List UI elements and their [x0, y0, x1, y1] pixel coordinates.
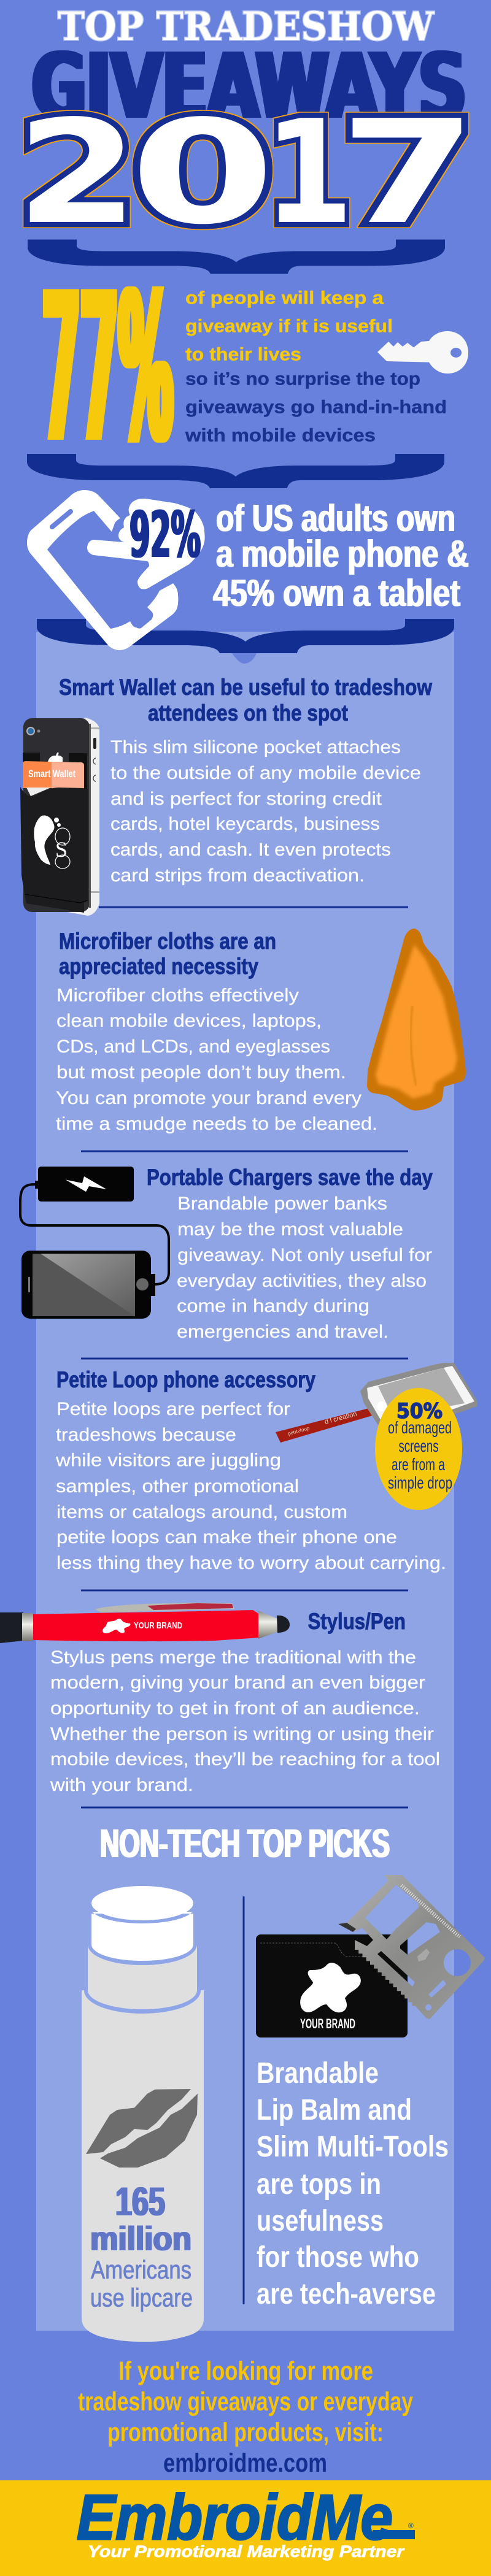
body text: mobile devices, they’ll be reaching for a tool — [50, 1749, 440, 1769]
brace three — [37, 619, 454, 664]
body text: items or catalogs around, custom — [56, 1502, 347, 1522]
body text: Whether the person is writing or using their — [50, 1724, 434, 1744]
image: phone with wallet: Smart Wallet — [28, 768, 75, 780]
body text: CDs, and LCDs, and eyeglasses — [56, 1037, 330, 1057]
icon: wallet logo — [34, 816, 70, 868]
title line: 2017: 7 — [339, 90, 477, 256]
statement: usefulness — [257, 2205, 384, 2237]
body text — [110, 737, 421, 886]
body text: while visitors are juggling — [55, 1451, 281, 1471]
stat: 92 percent: 92% — [130, 497, 201, 572]
footer band — [0, 2480, 491, 2576]
yellow statement: giveaway if it is useful — [185, 316, 393, 337]
image: slim multi-tool — [338, 1875, 485, 2019]
heading: Stylus/Pen — [308, 1609, 406, 1634]
title line: 2017: 2 — [16, 90, 139, 256]
body text: to the outside of any mobile device — [110, 763, 421, 783]
body text — [50, 1647, 440, 1795]
yellow statement: of people will keep a — [185, 288, 384, 309]
title line: top tradeshow: TOP TRADESHOW — [58, 4, 435, 50]
body text: clean mobile devices, laptops, — [56, 1011, 322, 1031]
title line: 2017: 1 — [264, 90, 354, 256]
tagline: Your Promotional Marketing Partner — [88, 2542, 405, 2561]
section: portable chargers — [20, 1165, 433, 1342]
body text — [177, 1194, 432, 1342]
image: phone with loop strap: petiteloop — [287, 1425, 311, 1436]
callout: 50 percent: 50% — [396, 1399, 443, 1424]
title line: 2017: 0 — [130, 90, 275, 256]
body text: opportunity to get in front of an audience. — [50, 1698, 420, 1719]
icon: key — [377, 331, 468, 374]
image: stylus pen: YOUR BRAND — [134, 1620, 182, 1631]
body text: with your brand. — [50, 1775, 193, 1795]
closing call to action — [78, 2356, 413, 2478]
stat: 165 million: million — [90, 2219, 191, 2258]
icon: power bank charging phone — [20, 1167, 169, 1319]
body text: Microfiber cloths effectively — [56, 986, 299, 1006]
statement: Slim Multi-Tools — [257, 2131, 449, 2163]
body text: and is perfect for storing credit — [110, 789, 382, 809]
body text: Stylus pens merge the traditional with the — [50, 1647, 416, 1668]
heading — [59, 929, 276, 979]
statement: are tops in — [257, 2168, 381, 2201]
section: multi-tool — [256, 1875, 485, 2310]
closing call to action: promotional products, visit: — [107, 2418, 384, 2447]
section: petite loop — [55, 1363, 477, 1573]
body text: may be the most valuable — [177, 1219, 403, 1240]
blue statement: giveaways go hand-in-hand — [185, 397, 447, 418]
statement: Brandable — [257, 2057, 379, 2090]
icon: lips — [86, 2089, 198, 2168]
heading — [59, 675, 432, 726]
section: microfiber cloths — [56, 929, 466, 1134]
title — [16, 4, 477, 256]
blue statement: with mobile devices — [185, 426, 376, 446]
brace two — [27, 454, 444, 488]
body text: emergencies and travel. — [177, 1322, 389, 1342]
yellow statement — [185, 288, 393, 364]
title line: 2017 — [16, 90, 477, 256]
body text — [55, 1399, 446, 1573]
body text — [56, 986, 377, 1134]
yellow statement: to their lives — [185, 345, 301, 364]
heading: Microfiber cloths are an — [59, 929, 276, 954]
callout: 50 percent: are from a — [392, 1455, 445, 1474]
stat: 165 million — [90, 2179, 193, 2312]
icon: brand splat — [300, 1963, 361, 2012]
heading: attendees on the spot — [148, 700, 348, 726]
heading: appreciated necessity — [59, 954, 258, 979]
image: orange cloth — [367, 929, 466, 1111]
statement — [257, 2057, 449, 2310]
panel: light content column — [36, 632, 454, 1104]
body text: samples, other promotional — [56, 1476, 299, 1497]
image: phone with loop strap: d l creation — [324, 1410, 358, 1426]
body text: petite loops can make their phone one — [56, 1527, 397, 1547]
heading: Smart Wallet can be useful to tradeshow — [59, 675, 432, 700]
body text: Petite loops are perfect for — [56, 1399, 290, 1419]
body text: card strips from deactivation. — [110, 865, 365, 886]
stat: 165 million: Americans — [91, 2255, 191, 2284]
body text: everyday activities, they also — [177, 1271, 427, 1291]
stat: 165 million: 165 — [115, 2179, 165, 2224]
callout: 50 percent: simple drop — [388, 1473, 452, 1492]
section: stylus pen — [0, 1603, 440, 1795]
statement: are tech-averse — [257, 2278, 436, 2310]
heading: Petite Loop phone accessory — [56, 1367, 315, 1392]
logo: EmbroidMe: EmbroidMe — [77, 2482, 393, 2553]
image: lip balm tube — [82, 1886, 204, 2342]
blue statement — [185, 369, 447, 446]
body text: This slim silicone pocket attaches — [110, 737, 401, 757]
body text: Brandable power banks — [177, 1194, 387, 1214]
stat: 165 million: use lipcare — [90, 2283, 193, 2312]
logo: EmbroidMe: ® — [408, 2521, 414, 2530]
body text: giveaway. Not only useful for — [177, 1245, 432, 1265]
callout: 50 percent — [375, 1388, 462, 1510]
blue statement: so it’s no surprise the top — [185, 369, 420, 389]
statement: Lip Balm and — [257, 2094, 412, 2126]
icon: brand splat — [102, 1619, 131, 1633]
closing call to action: embroidme.com — [163, 2448, 327, 2478]
icon: hand holding phone — [27, 490, 205, 650]
image: phone with wallet — [20, 718, 99, 916]
body text: less thing they have to worry about carrying. — [56, 1553, 446, 1573]
body text: You can promote your brand every — [56, 1088, 361, 1108]
body text: time a smudge needs to be cleaned. — [56, 1114, 377, 1134]
closing call to action: If you're looking for more — [118, 2356, 373, 2386]
body text: come in handy during — [177, 1296, 369, 1316]
body text: cards, and cash. It even protects — [110, 840, 391, 860]
statement: for those who — [257, 2241, 419, 2274]
panel: light content column lower — [36, 1104, 454, 2331]
callout: 50 percent: screens — [399, 1436, 438, 1455]
image: black wallet — [256, 1934, 408, 2037]
section: smart wallet — [20, 675, 432, 916]
stat: 92 percent — [27, 490, 469, 650]
body text: but most people don’t buy them. — [56, 1062, 346, 1083]
image: phone with loop strap — [276, 1363, 477, 1443]
body text: cards, hotel keycards, business — [110, 814, 380, 834]
heading: Portable Chargers save the day — [147, 1165, 433, 1190]
image: stylus pen — [0, 1603, 290, 1643]
brace one — [28, 239, 445, 274]
callout: 50 percent: of damaged — [388, 1418, 452, 1437]
statement — [213, 497, 469, 615]
section: lip balm — [82, 1886, 204, 2342]
body text: tradeshows because — [56, 1425, 236, 1445]
body text: modern, giving your brand an even bigger — [50, 1673, 425, 1693]
icon: wallet logo: S — [55, 837, 68, 862]
image: black wallet: YOUR BRAND — [300, 2016, 355, 2031]
